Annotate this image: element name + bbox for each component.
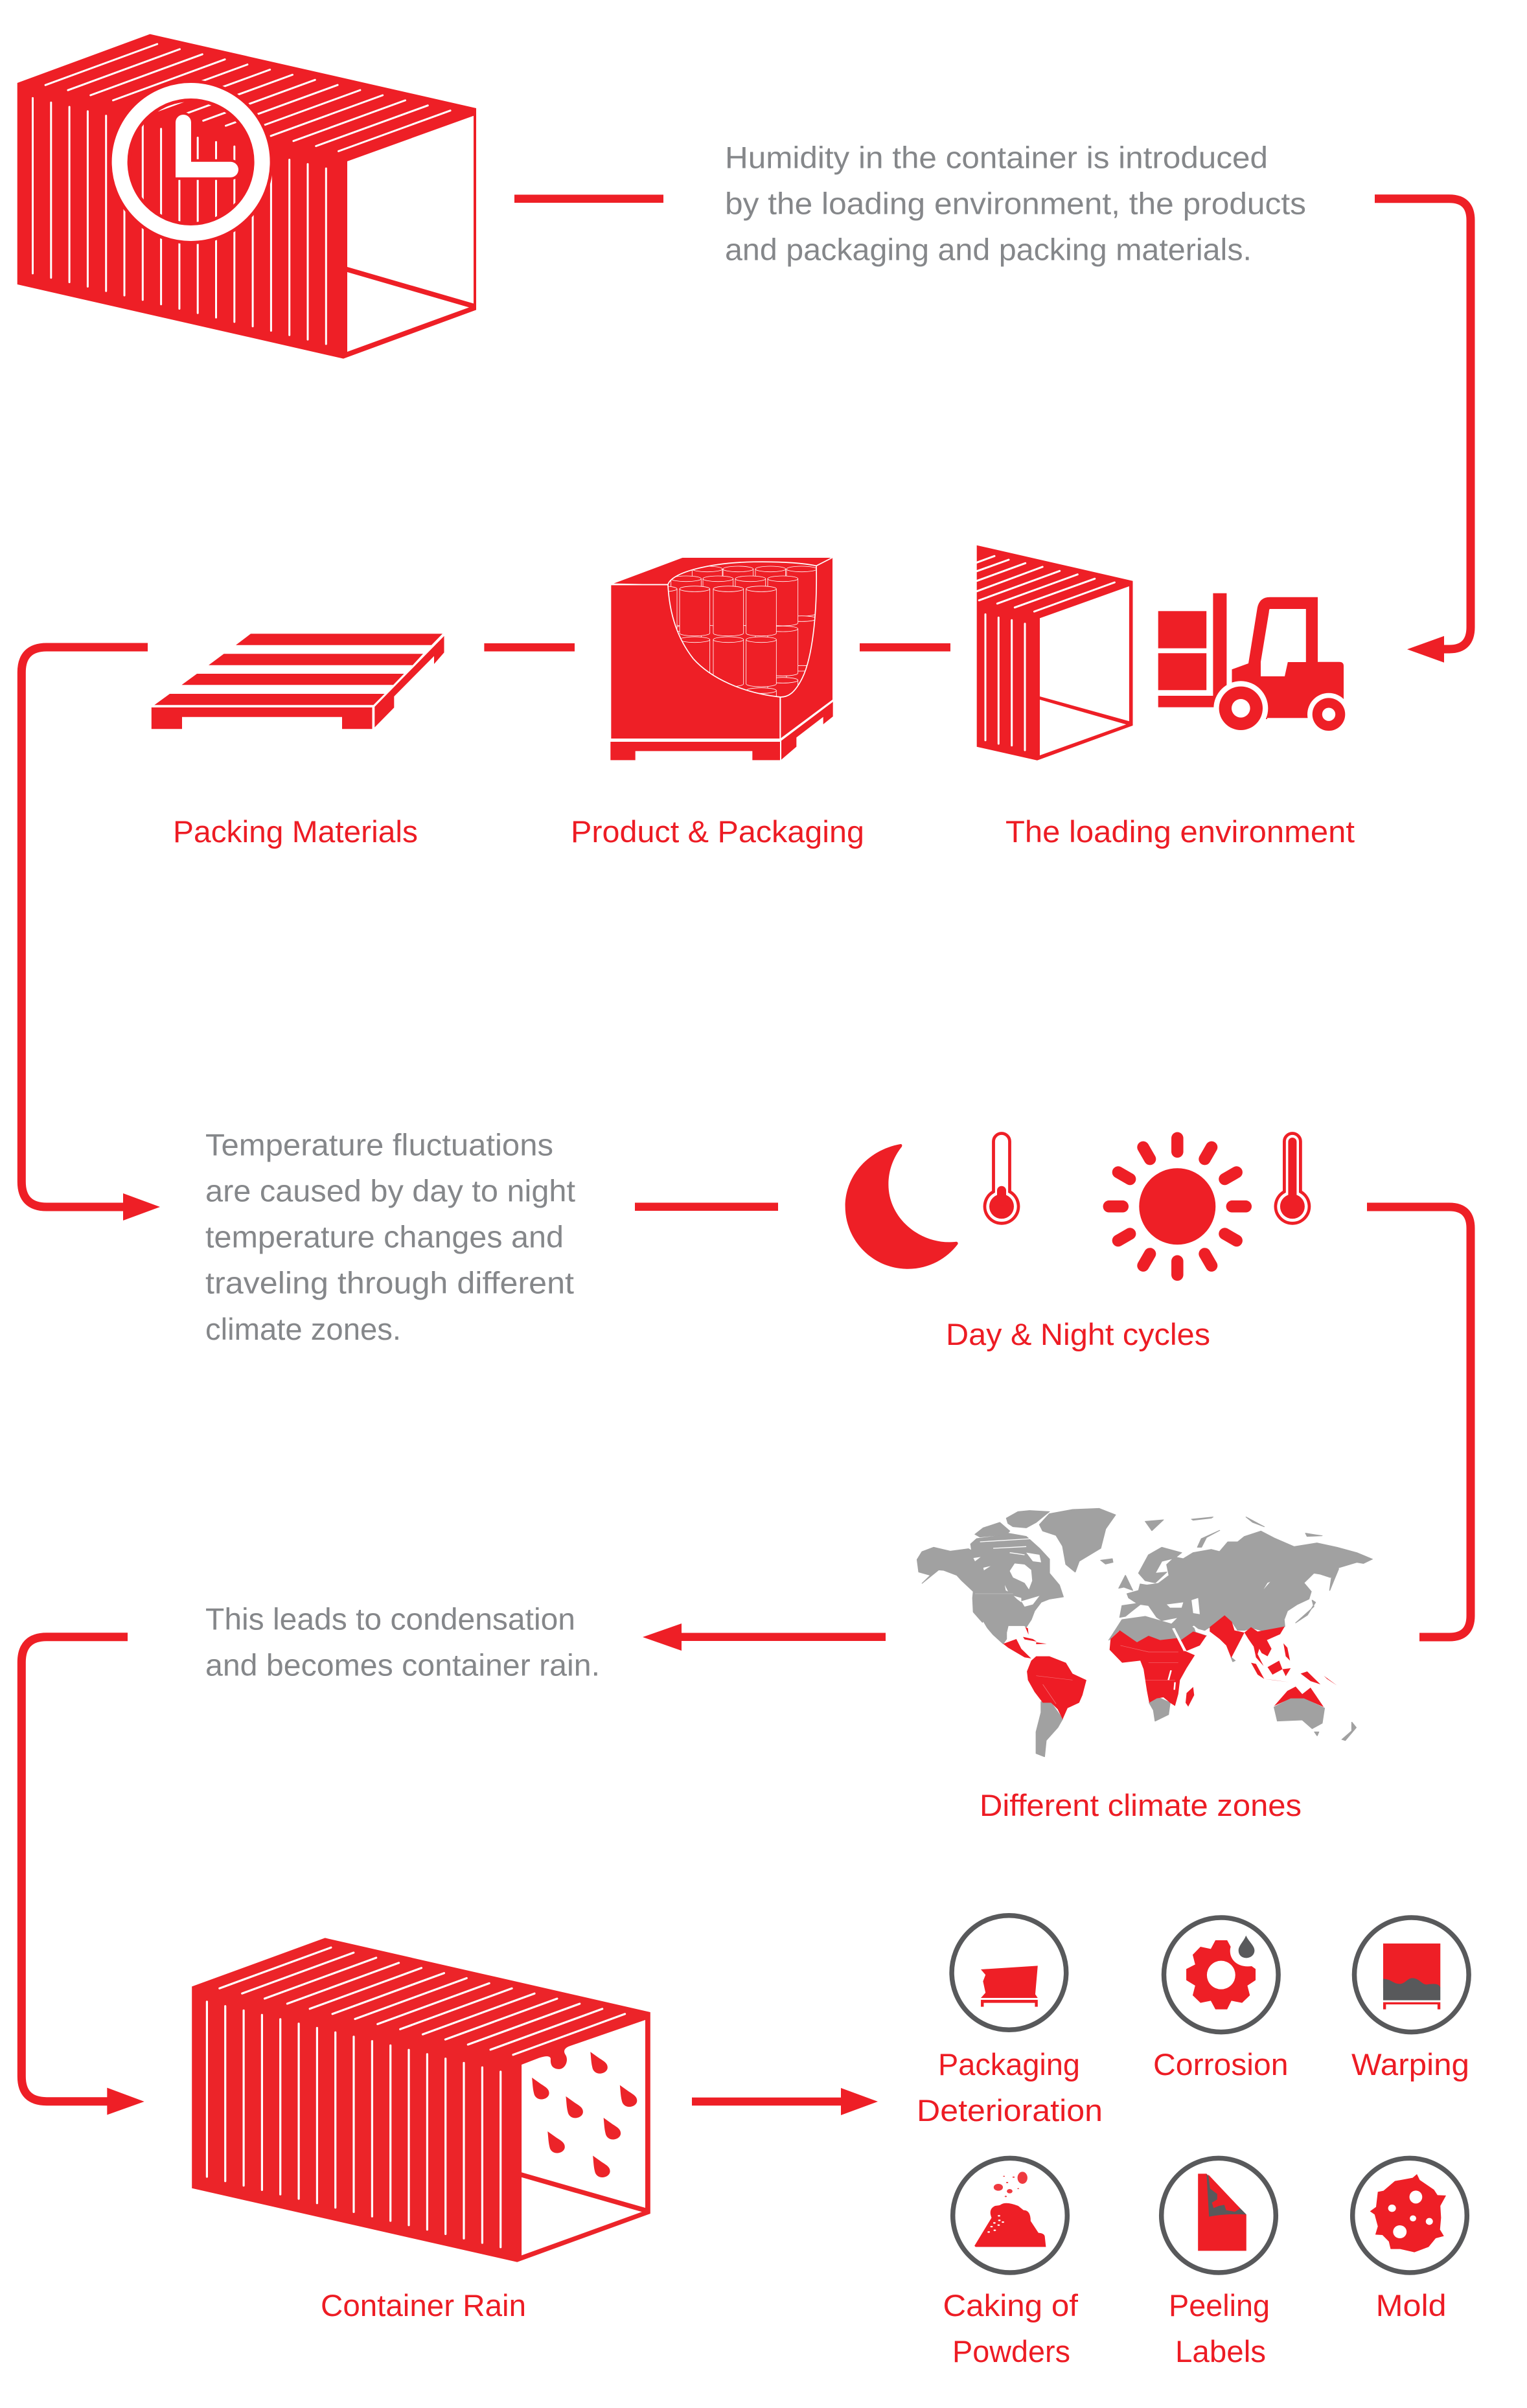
text: condensation (205, 1602, 600, 1682)
effect: caking of powders (943, 2158, 1079, 2368)
text: temperature fluctuations: Temperature fluctuations (205, 1127, 553, 1162)
effect: peeling labels: Peeling (1169, 2288, 1270, 2322)
effect: caking of powders: Powders (952, 2334, 1070, 2368)
connector: text to day and night (635, 1202, 778, 1211)
text: temperature fluctuations (205, 1127, 575, 1346)
effect: peeling labels (1162, 2158, 1276, 2368)
text: humidity intro: and packaging and packing materials. (725, 232, 1252, 267)
text: humidity intro: Humidity in the container is introduced (725, 140, 1268, 174)
icon: moon (845, 1144, 958, 1269)
connector: loading to product (860, 643, 950, 652)
arrow: rain to effects (692, 2088, 878, 2115)
label: climate zones: Different climate zones (980, 1788, 1302, 1822)
arrow: condensation to rain container (21, 1637, 144, 2115)
icon: container with clock (17, 34, 476, 359)
text: humidity intro (725, 140, 1306, 267)
text: temperature fluctuations: climate zones. (205, 1312, 401, 1346)
text: condensation: and becomes container rain. (205, 1647, 600, 1682)
borders and red sea (1173, 1628, 1185, 1651)
effect: packaging deterioration: Deterioration (917, 2093, 1103, 2127)
label: container rain: Container Rain (321, 2288, 526, 2322)
arrow: intro to loading environment (1375, 199, 1471, 663)
effect: caking of powders: Caking of (943, 2288, 1079, 2322)
text: humidity intro: by the loading environment, the products (725, 187, 1306, 221)
effect: packaging deterioration: Packaging (938, 2047, 1080, 2081)
cylinders (647, 566, 817, 738)
effect: warping (1351, 1918, 1469, 2081)
connector: product to pallet (484, 643, 575, 652)
icon: sun (1109, 1138, 1246, 1275)
label: day and night: Day & Night cycles (946, 1317, 1210, 1351)
arrow: pallet to temperature text (21, 647, 160, 1221)
water drops (532, 2052, 637, 2177)
arrow: day and night to map (1367, 1207, 1471, 1637)
label: packing materials: Packing Materials (173, 814, 418, 849)
forklift (1158, 593, 1350, 736)
red climate zones (1003, 1615, 1337, 1719)
text: temperature fluctuations: temperature changes and (205, 1219, 564, 1254)
effect: mold: Mold (1376, 2288, 1447, 2322)
connector: container to text (514, 194, 663, 203)
text: temperature fluctuations: are caused by day to night (205, 1174, 575, 1208)
icon: high thermometer (1276, 1133, 1309, 1223)
effect: corrosion (1153, 1918, 1288, 2081)
label: loading environment: The loading environment (1005, 814, 1355, 849)
icon: container with rain (192, 1938, 650, 2262)
effect: corrosion: Corrosion (1153, 2047, 1288, 2081)
effect: peeling labels: Labels (1175, 2334, 1266, 2368)
label: product and packaging: Product & Packaging (571, 814, 864, 849)
icon: product and packaging (610, 558, 833, 760)
arrow: map to condensation text (643, 1623, 886, 1651)
icon: pallet (152, 634, 444, 729)
icon: low thermometer (985, 1133, 1018, 1223)
effect: warping: Warping (1351, 2047, 1469, 2081)
gray land (917, 1508, 1372, 1644)
icon: small container and forklift (977, 545, 1350, 761)
text: temperature fluctuations: traveling through different (205, 1266, 574, 1300)
world map (917, 1508, 1372, 1757)
gray africa and southern continents (1036, 1616, 1356, 1757)
text: condensation: This leads to condensation (205, 1602, 575, 1636)
seas and lakes (973, 1553, 1270, 1636)
effect: mold (1353, 2158, 1467, 2322)
effect: packaging deterioration (917, 1916, 1103, 2127)
